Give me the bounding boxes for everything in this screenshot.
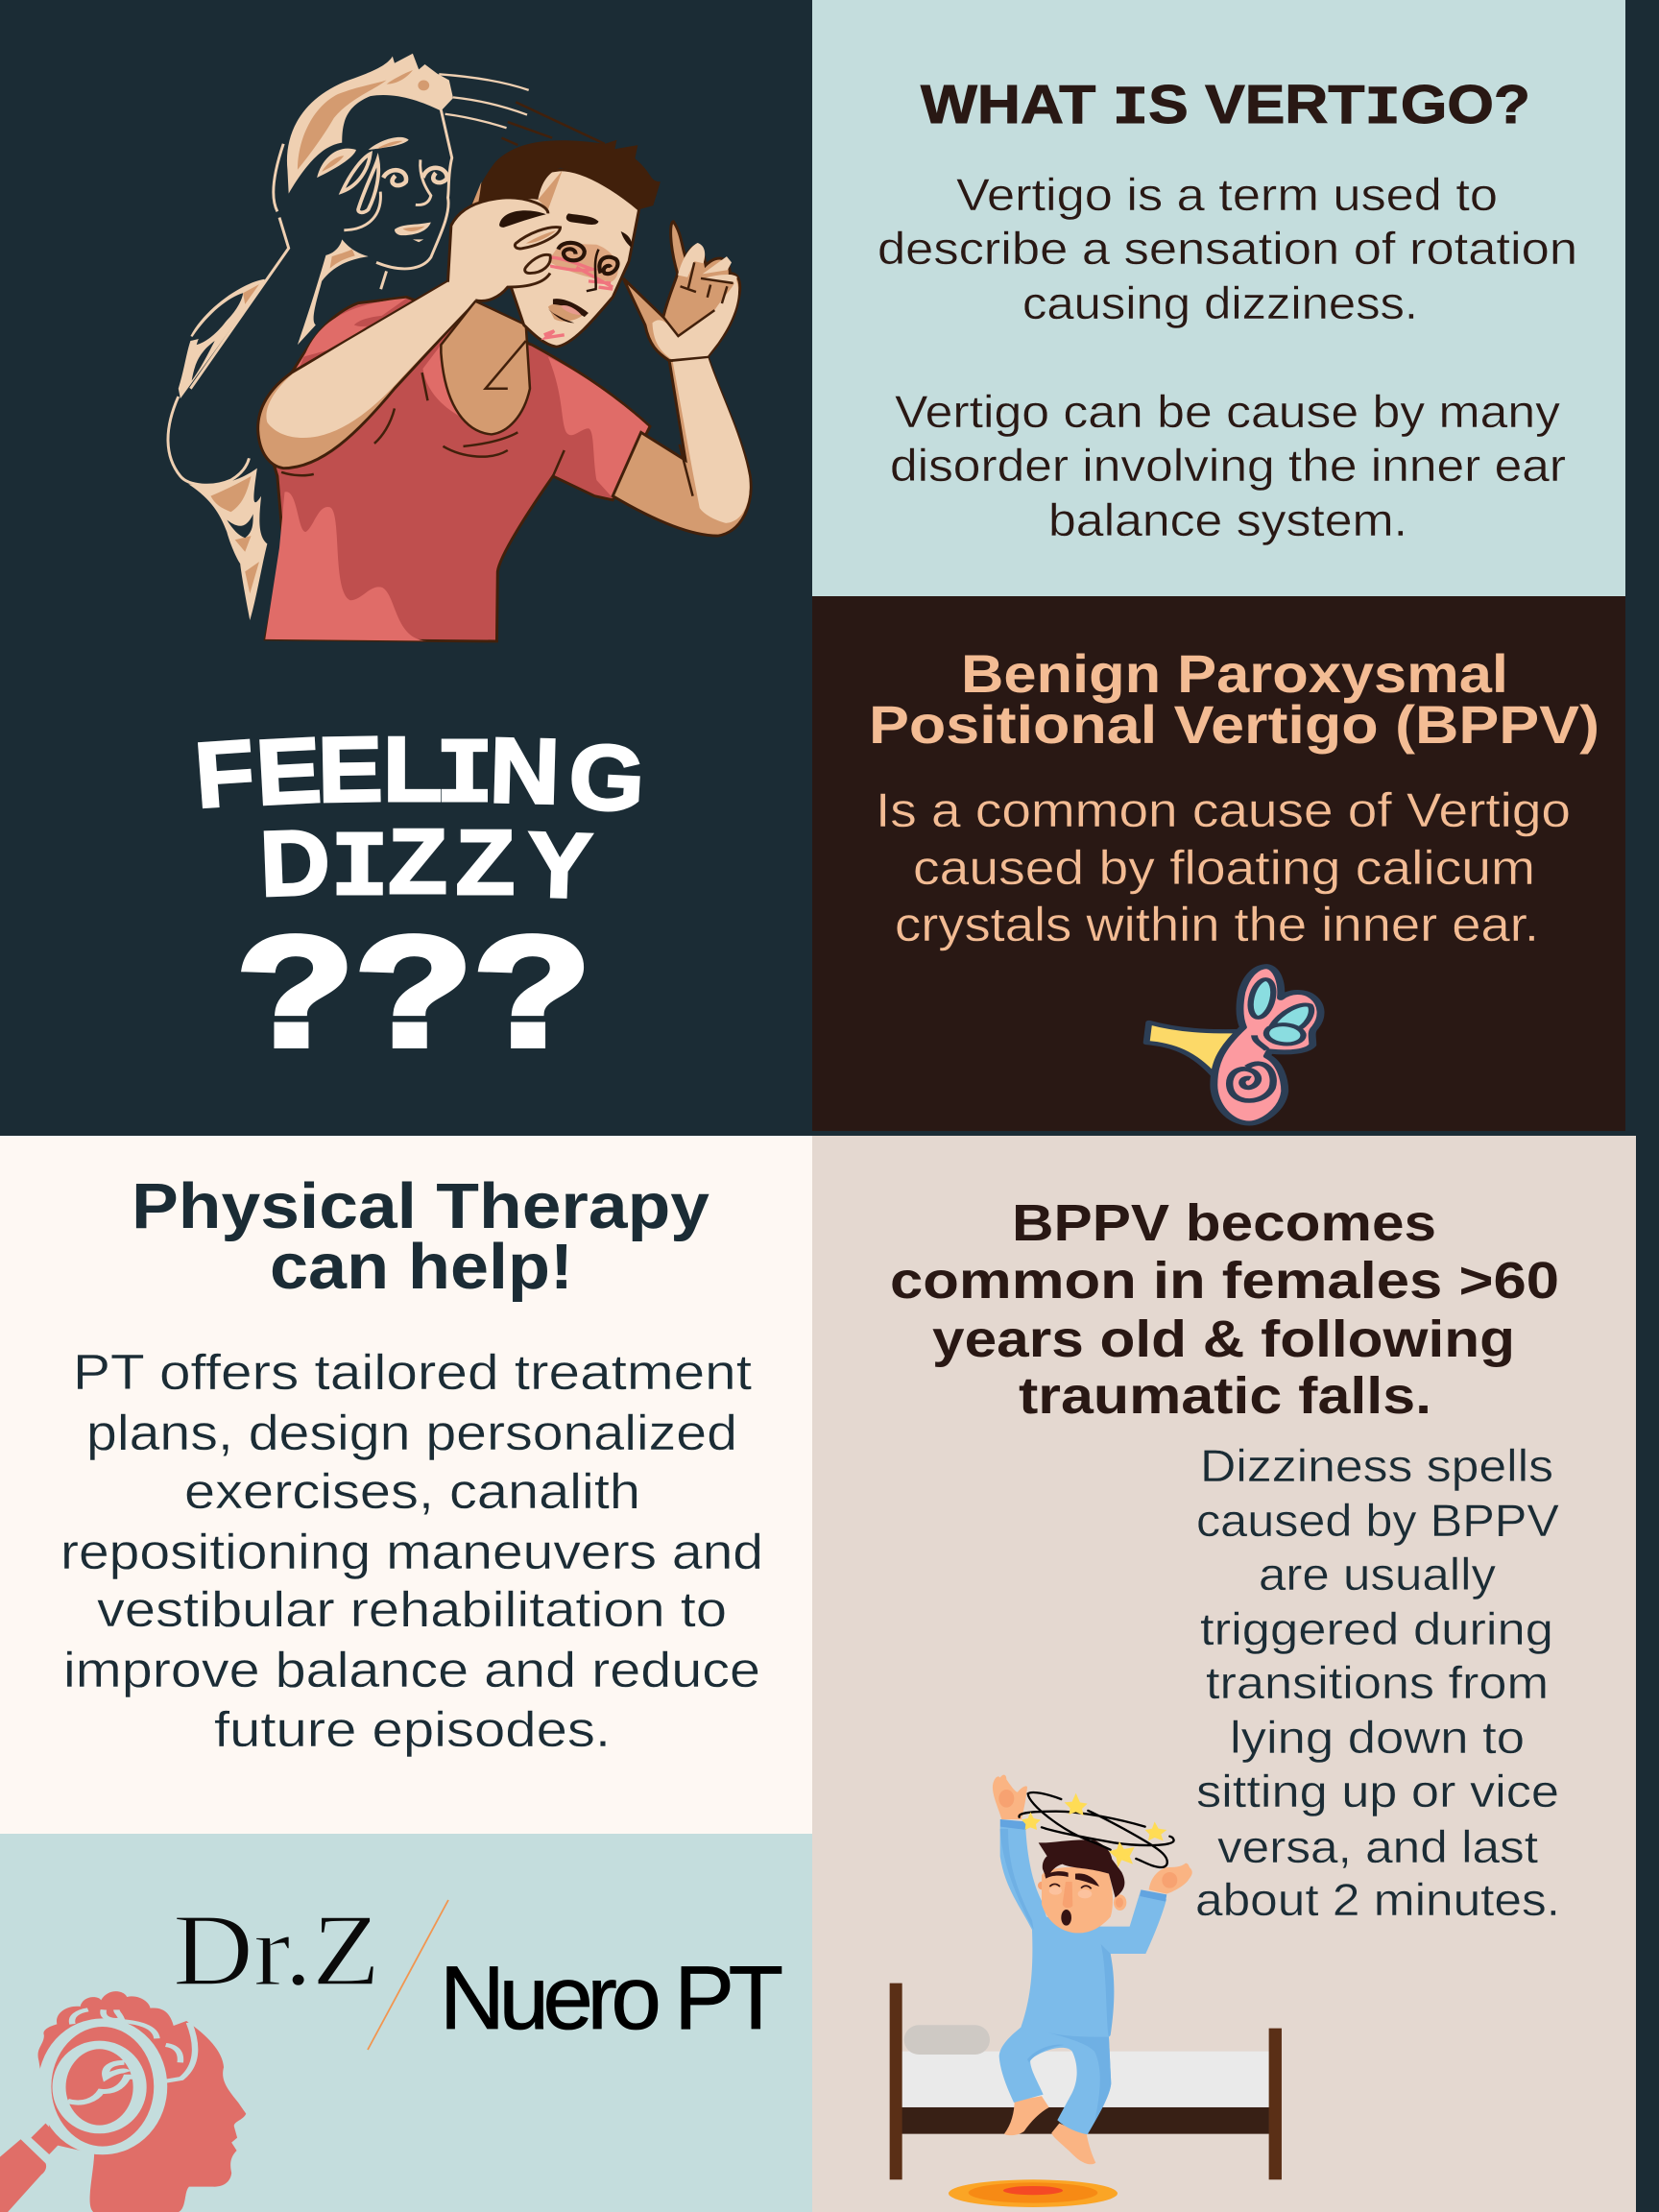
text: dizziness spells: about 2 minutes. (1195, 1874, 1560, 1925)
text: what is vertigo: causing dizziness. (1022, 277, 1418, 328)
text: what is vertigo (878, 169, 1577, 545)
text: BPPV definition: Is a common cause of Vertigo (876, 783, 1571, 837)
heading: feeling dizzy: I (330, 817, 389, 922)
panel: BPPV risk (812, 1136, 1636, 2212)
heading: physical therapy (132, 1170, 709, 1303)
heading: feeling dizzy: E (253, 718, 324, 824)
heading: BPPV risk: traumatic falls. (1019, 1367, 1431, 1425)
man: head (1038, 1839, 1126, 1933)
text: dizziness spells (1195, 1440, 1560, 1925)
dizzy stars (1022, 1793, 1166, 1867)
heading: feeling dizzy: L (383, 717, 443, 820)
illustration: man jumping off bed (890, 1775, 1282, 2207)
text: what is vertigo: balance system. (1048, 494, 1407, 545)
heading: feeling dizzy: G (566, 724, 647, 830)
text: BPPV definition: caused by floating calicum (913, 841, 1535, 895)
bed (890, 1984, 1282, 2179)
text: physical therapy: future episodes. (214, 1702, 611, 1758)
text: dizziness spells: are usually (1259, 1549, 1497, 1599)
text: dizziness spells: Dizziness spells (1200, 1440, 1553, 1491)
text: what is vertigo: Vertigo is a term used to (956, 169, 1498, 220)
logo: Dr.Z Nuero PT (173, 1894, 783, 2050)
heading: feeling dizzy: ??? (236, 903, 591, 1079)
text: what is vertigo: Vertigo can be cause by many (895, 386, 1561, 437)
man: shirt (265, 297, 650, 641)
man: sideburn (464, 181, 481, 227)
motion lines (439, 74, 605, 145)
heading: BPPV risk: common in females >60 (890, 1252, 1559, 1310)
heading: BPPV risk: BPPV becomes (1012, 1194, 1436, 1252)
text: physical therapy: improve balance and reduce (63, 1643, 760, 1698)
heading: BPPV risk (890, 1194, 1559, 1425)
text: BPPV definition (876, 783, 1571, 951)
heading: feeling dizzy: E (317, 717, 383, 821)
heading: BPPV definition: Benign Paroxysmal (961, 643, 1508, 704)
man: feet (1004, 2096, 1095, 2164)
heading: feeling dizzy: I (436, 724, 493, 829)
man: lowered arm and hand (613, 222, 751, 536)
text: physical therapy: vestibular rehabilitation to (97, 1582, 727, 1638)
man: hair (464, 140, 661, 226)
panel: BPPV definition (812, 596, 1625, 1131)
logo: Dr.Z Nuero PT: Dr.Z (173, 1894, 380, 2008)
illustration: dizzy man with ghost image (168, 54, 751, 641)
panel: physical therapy (0, 1136, 812, 1834)
man: raised arm and hand over face (258, 198, 561, 469)
dizzy orbit lines (1020, 1792, 1174, 1867)
heading: BPPV risk: years old & following (932, 1310, 1515, 1368)
man: neck (441, 301, 530, 434)
heading: feeling dizzy (191, 717, 647, 1079)
man: hands (993, 1775, 1192, 1894)
text: what is vertigo: disorder involving the inner ear (890, 440, 1566, 491)
heading: feeling dizzy: Z (388, 809, 447, 912)
heading: physical therapy: can help! (270, 1231, 573, 1303)
icon: inner ear (1146, 967, 1321, 1123)
heading: feeling dizzy: Z (456, 810, 515, 913)
text: dizziness spells: triggered during (1200, 1603, 1553, 1654)
text: dizziness spells: sitting up or vice (1196, 1766, 1559, 1816)
man: pyjamas (999, 1819, 1166, 2134)
text: what is vertigo: describe a sensation of rotation (878, 223, 1577, 274)
icon: head with magnifying glass (0, 1991, 246, 2212)
panel: logo (0, 1834, 812, 2212)
man: neck crease (486, 341, 526, 389)
heading: what is vertigo: WHAT IS VERT IGO? (921, 74, 1530, 140)
text: physical therapy: repositioning maneuvers and (60, 1525, 763, 1580)
text: dizziness spells: lying down to (1230, 1712, 1525, 1763)
text: BPPV definition: crystals within the inner ear. (895, 898, 1539, 951)
text: physical therapy: exercises, canalith (184, 1464, 640, 1520)
heading: feeling dizzy: Y (525, 812, 593, 918)
heading: physical therapy: Physical Therapy (132, 1170, 709, 1242)
heading: feeling dizzy: N (489, 718, 561, 823)
heading: BPPV definition: Positional Vertigo (BPPV) (869, 694, 1599, 755)
text: dizziness spells: caused by BPPV (1196, 1495, 1560, 1546)
ghost image of man (168, 54, 453, 620)
rug (949, 2179, 1118, 2207)
text: dizziness spells: transitions from (1206, 1657, 1549, 1708)
text: physical therapy (60, 1345, 763, 1758)
heading: BPPV definition (869, 643, 1599, 755)
text: dizziness spells: versa, and last (1217, 1821, 1538, 1872)
logo: Dr.Z Nuero PT: Nuero PT (440, 1947, 783, 2048)
text: physical therapy: PT offers tailored treatment (73, 1345, 753, 1401)
panel: what is vertigo (812, 0, 1625, 596)
text: physical therapy: plans, design personalized (86, 1406, 737, 1461)
man: head (499, 170, 639, 347)
heading: feeling dizzy: D (258, 810, 331, 915)
heading: feeling dizzy: F (191, 720, 258, 827)
